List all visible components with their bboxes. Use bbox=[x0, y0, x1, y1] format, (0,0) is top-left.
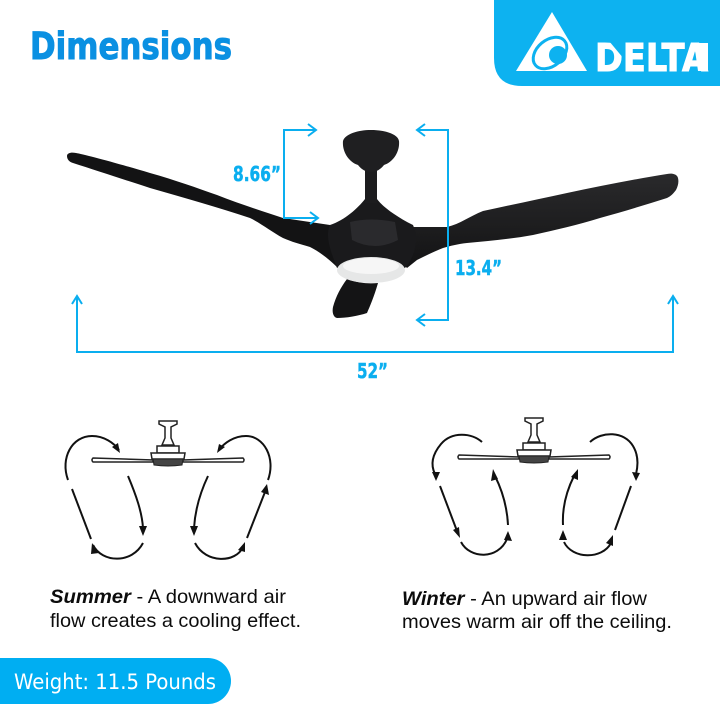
winter caption: moves warm air off the ceiling. bbox=[402, 611, 672, 633]
dimension: total height bbox=[417, 124, 502, 326]
label 8.66: 8.66” bbox=[233, 162, 281, 186]
title: Dimensions bbox=[30, 25, 232, 68]
icon: delta triangle bbox=[516, 12, 587, 75]
summer fan bbox=[92, 421, 244, 466]
fan hub bbox=[328, 199, 416, 268]
winter caption bbox=[402, 588, 672, 633]
summer caption bbox=[50, 586, 301, 632]
label 52: 52” bbox=[357, 359, 388, 383]
fan canopy bbox=[343, 130, 399, 172]
logo wordmark: DELTA bbox=[595, 36, 709, 80]
fan downrod bbox=[365, 165, 377, 203]
summer airflow diagram bbox=[65, 421, 271, 559]
fan illustration bbox=[67, 130, 678, 318]
dimension: blade span bbox=[72, 296, 678, 383]
weight pill bbox=[0, 658, 231, 704]
label 13.4: 13.4” bbox=[455, 256, 502, 280]
fan right blade bbox=[390, 174, 678, 268]
fan rear blade bbox=[333, 279, 378, 318]
summer arrows bbox=[65, 436, 271, 559]
fan left blade bbox=[67, 153, 345, 268]
winter airflow diagram bbox=[432, 418, 640, 555]
winter caption: Winter - An upward air flow bbox=[402, 588, 648, 610]
weight label: Weight: 11.5 Pounds bbox=[14, 670, 216, 694]
winter fan bbox=[458, 418, 610, 463]
summer caption: Summer - A downward air bbox=[50, 586, 287, 608]
logo badge bbox=[494, 0, 720, 86]
winter arrows bbox=[432, 434, 640, 555]
fan light bbox=[337, 257, 405, 283]
summer caption: flow creates a cooling effect. bbox=[50, 610, 301, 632]
dimension: downrod height bbox=[233, 124, 318, 224]
